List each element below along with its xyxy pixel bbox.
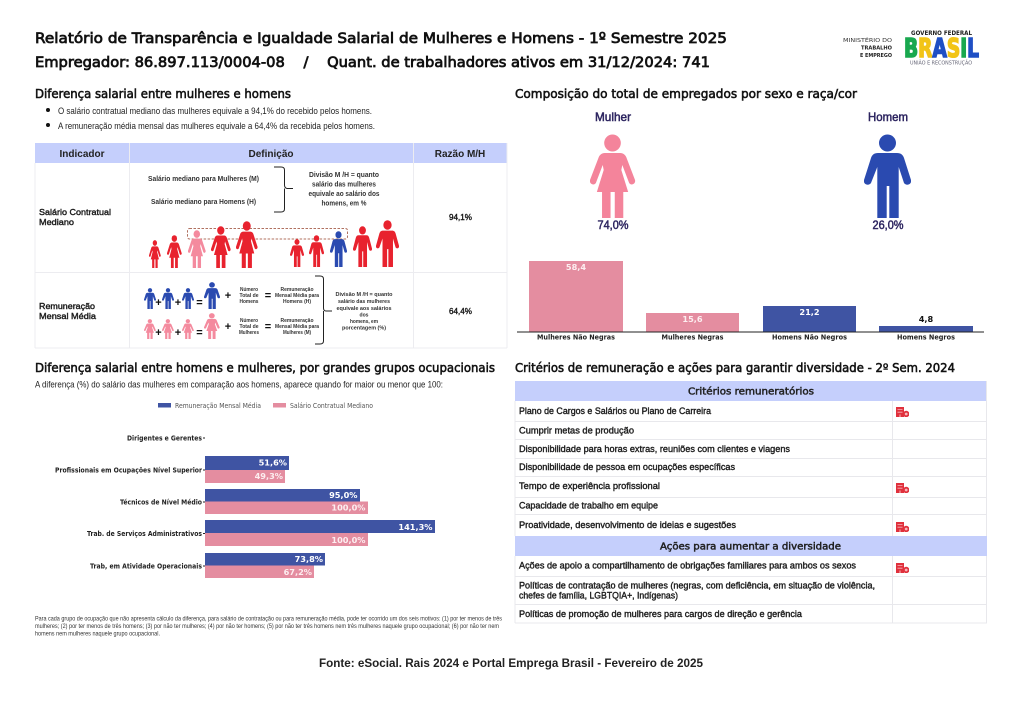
bar chart: sexo e raça/cor: Homens Não Negros bbox=[772, 334, 847, 342]
definition explanation: salário das mulheres bbox=[312, 180, 376, 188]
formula: women: + bbox=[225, 321, 231, 333]
criteria rows bbox=[519, 406, 790, 530]
criteria rows: Disponibilidade para horas extras, reuniões com clientes e viagens bbox=[519, 444, 790, 454]
title: Relatório de Transparência e Igualdade Salarial de Mulheres e Homens - 1º Semestre 2025 bbox=[35, 31, 727, 47]
action rows: chefes de família, LGBTQIA+, Indígenas) bbox=[519, 590, 678, 600]
formula: women: Mulheres (M) bbox=[283, 330, 311, 336]
logo wordmark: Brasil: BRASIL bbox=[904, 34, 979, 64]
title bbox=[35, 31, 727, 71]
pictogram: homem: 26,0% bbox=[872, 218, 904, 232]
footnote bbox=[35, 616, 503, 638]
formula: women: Remuneração bbox=[280, 318, 314, 324]
table header: Indicador bbox=[59, 149, 105, 160]
pictogram: mulher: 74,0% bbox=[598, 218, 629, 232]
formula: women: = bbox=[265, 321, 271, 333]
bullet list: A remuneração média mensal das mulheres equivale a 64,4% da recebida pelos homens. bbox=[58, 121, 375, 132]
bar chart: grupos ocupacionais: Trab. de Serviços Administrativos bbox=[87, 530, 202, 538]
section header: critérios remuneratórios: Critérios remuneratórios bbox=[688, 386, 814, 398]
bar chart: sexo e raça/cor: Mulheres Não Negras bbox=[537, 334, 615, 342]
formula: men: + bbox=[225, 290, 231, 302]
bar chart: grupos ocupacionais: Profissionais em Ocupações Nível Superior bbox=[55, 466, 202, 474]
formula: women: Total de bbox=[240, 324, 259, 330]
definition explanation: Divisão M /H = quanto bbox=[336, 292, 393, 298]
icons: women by salary bbox=[149, 221, 258, 268]
indicator name bbox=[39, 207, 111, 227]
bar chart: sexo e raça/cor: 21,2 bbox=[799, 307, 820, 317]
formula: men: + bbox=[155, 297, 162, 309]
title: Empregador: 86.897.113/0004-08 / Quant. de trabalhadores ativos em 31/12/2024: 741 bbox=[35, 55, 710, 71]
formula: women: Mensal Média para bbox=[275, 324, 320, 330]
ratio value: 64,4% bbox=[449, 306, 472, 316]
bar chart: grupos ocupacionais: 73,8% bbox=[295, 554, 323, 564]
bullet list bbox=[46, 106, 375, 132]
bar chart: grupos ocupacionais: 49,3% bbox=[255, 471, 283, 481]
legend: Remuneração Mensal Média bbox=[175, 402, 261, 410]
definition explanation bbox=[308, 170, 380, 208]
icons: critério adotado bbox=[896, 407, 908, 573]
action rows: Políticas de promoção de mulheres para cargos de direção e gerência bbox=[519, 609, 802, 619]
bar chart: grupos ocupacionais: 67,2% bbox=[284, 567, 312, 577]
table header bbox=[59, 149, 485, 160]
bullet list: O salário contratual mediano das mulheres equivale a 94,1% do recebido pelos homens. bbox=[58, 106, 372, 117]
heading: Diferença salarial entre homens e mulheres, por grandes grupos ocupacionais bbox=[35, 361, 495, 375]
indicator name bbox=[39, 301, 96, 321]
bar chart: grupos ocupacionais: 100,0% bbox=[331, 535, 366, 545]
formula: men: Total de bbox=[240, 293, 259, 299]
criteria rows: Disponibilidade de pessoa em ocupações específicas bbox=[519, 462, 735, 472]
logo text: união e reconstrução: UNIÃO E RECONSTRUÇÃO bbox=[910, 60, 972, 66]
criteria rows: Cumprir metas de produção bbox=[519, 426, 634, 436]
definition explanation: salário das mulheres bbox=[338, 299, 390, 305]
legend: Salário Contratual Mediano bbox=[290, 402, 373, 410]
criteria rows: Plano de Cargos e Salários ou Plano de Carreira bbox=[519, 406, 711, 416]
bar chart: grupos ocupacionais: Técnicos de Nível Médio bbox=[120, 498, 202, 506]
source footer: Fonte: eSocial. Rais 2024 e Portal Emprega Brasil - Fevereiro de 2025 bbox=[319, 656, 703, 670]
pictogram: mulher bbox=[590, 110, 635, 232]
table header: Definição bbox=[248, 149, 294, 160]
icons: men by salary bbox=[290, 220, 399, 267]
bar chart: sexo e raça/cor: 4,8 bbox=[919, 314, 934, 324]
definition explanation: dos bbox=[360, 312, 368, 318]
row: remuneração mensal média bbox=[39, 276, 472, 344]
definition labels bbox=[148, 174, 259, 206]
heading: Critérios de remuneração e ações para garantir diversidade - 2º Sem. 2024 bbox=[515, 361, 955, 375]
logos: ministério e governo federal bbox=[843, 30, 979, 66]
panel: critérios de remuneração e ações bbox=[515, 361, 987, 623]
formula: women: + bbox=[155, 327, 162, 339]
formula: men: Número bbox=[240, 287, 259, 293]
formula: men: Homens bbox=[240, 299, 258, 305]
footnote: mulheres; (2) por ter menos de três homens; (3) por não ter mulheres; (4) por não ter homens; (5) por não ter três homens nem três mulheres naquele grupo ocupacional; (6) por não ter nem bbox=[35, 623, 499, 630]
formula: women: + bbox=[175, 327, 181, 339]
bar chart: sexo e raça/cor: 15,6 bbox=[682, 314, 703, 324]
definition explanation: porcentagem (%) bbox=[342, 326, 386, 332]
indicator name: Salário Contratual bbox=[39, 207, 111, 217]
definition labels: Salário mediano para Mulheres (M) bbox=[148, 174, 259, 183]
heading: Diferença salarial entre mulheres e homens bbox=[35, 87, 291, 101]
formula: women: Mulheres bbox=[239, 330, 259, 336]
pictogram: mulher: Mulher bbox=[595, 110, 631, 124]
definition explanation: equivale ao salário dos bbox=[308, 189, 380, 198]
definition explanation: equivale aos salários bbox=[336, 306, 392, 312]
formula: men: Homens (H) bbox=[283, 299, 311, 305]
bar chart: grupos ocupacionais: Trab, em Atividade Operacionais bbox=[90, 562, 202, 570]
logo text: ministério: MINISTÉRIO DO bbox=[843, 36, 892, 44]
indicator name: Mensal Média bbox=[39, 311, 96, 321]
brace bbox=[274, 167, 293, 212]
bar chart: sexo e raça/cor: 58,4 bbox=[566, 262, 586, 272]
definition explanation: homens, em % bbox=[322, 198, 367, 208]
criteria rows: Proatividade, desenvolvimento de ideias e sugestões bbox=[519, 520, 737, 530]
bar chart: grupos ocupacionais bbox=[55, 434, 435, 578]
formula: women: = bbox=[196, 327, 203, 339]
criteria rows: Capacidade de trabalho em equipe bbox=[519, 500, 658, 510]
formula: women: Número bbox=[240, 318, 259, 324]
bar chart: grupos ocupacionais: Dirigentes e Gerentes bbox=[127, 434, 202, 442]
legend bbox=[158, 402, 373, 410]
ratio value: 94,1% bbox=[449, 212, 472, 222]
formula: men: = bbox=[196, 297, 203, 309]
footnote: Para cada grupo de ocupação que não apresenta cálculo da diferença, para salário de contratação ou para remuneração média, pode ter ocorrido um dos seis motivos: (1) por ter menos de três bbox=[35, 616, 503, 622]
action rows: Políticas de contratação de mulheres (negras, com deficiência, em situação de violência, bbox=[519, 580, 875, 590]
indicator name: Remuneração bbox=[39, 301, 95, 311]
footnote: homens nem mulheres naquele grupo ocupacional. bbox=[35, 630, 160, 638]
pictogram: homem: Homem bbox=[868, 110, 908, 124]
panel: composição do total de empregados bbox=[515, 87, 984, 342]
row: salário contratual mediano bbox=[39, 167, 472, 268]
table header: Razão M/H bbox=[435, 149, 485, 160]
bar chart: grupos ocupacionais: 141,3% bbox=[398, 522, 432, 532]
table: critérios bbox=[515, 381, 987, 623]
panel: diferença por grupos ocupacionais bbox=[35, 361, 503, 638]
brace bbox=[315, 276, 332, 344]
bar chart: grupos ocupacionais: 51,6% bbox=[259, 458, 287, 468]
formula: men: Remuneração bbox=[280, 287, 314, 293]
definition labels: Salário mediano para Homens (H) bbox=[151, 197, 256, 206]
bar chart: sexo e raça/cor: Mulheres Negras bbox=[662, 334, 724, 342]
action rows: Ações de apoio a compartilhamento de obrigações familiares para ambos os sexos bbox=[519, 560, 857, 570]
action rows bbox=[519, 560, 875, 619]
logo text: governo federal: GOVERNO FEDERAL bbox=[911, 30, 972, 37]
logo text: ministério: TRABALHO bbox=[861, 46, 892, 52]
bar chart: sexo e raça/cor bbox=[517, 261, 984, 342]
bar chart: sexo e raça/cor: Homens Negros bbox=[897, 334, 955, 342]
logo text: ministério bbox=[843, 36, 892, 59]
definition explanation: homens, em bbox=[350, 319, 378, 325]
heading: Composição do total de empregados por sexo e raça/cor bbox=[515, 87, 857, 101]
definition explanation: Divisão M /H = quanto bbox=[309, 170, 379, 179]
formula: men bbox=[144, 282, 320, 309]
dashed median highlight bbox=[188, 228, 348, 239]
formula: women bbox=[144, 313, 320, 339]
table: indicadores bbox=[35, 143, 507, 348]
criteria rows: Tempo de experiência profissional bbox=[519, 481, 660, 491]
formula: men: = bbox=[265, 290, 271, 302]
pictogram: homem bbox=[864, 110, 911, 232]
subtitle: A diferença (%) do salário das mulheres em comparação aos homens, aparece quando for maior ou menor que 100: bbox=[35, 380, 443, 390]
panel: diferença salarial entre mulheres e homens bbox=[35, 87, 507, 348]
indicator name: Mediano bbox=[39, 217, 74, 227]
formula: men: + bbox=[175, 297, 181, 309]
bar chart: grupos ocupacionais: 95,0% bbox=[329, 490, 358, 500]
logo text: ministério: E EMPREGO bbox=[860, 53, 892, 59]
section header: ações: Ações para aumentar a diversidade bbox=[660, 542, 841, 552]
definition explanation bbox=[336, 292, 393, 332]
bar chart: grupos ocupacionais: 100,0% bbox=[331, 502, 366, 512]
formula: men: Mensal Média para bbox=[275, 293, 320, 299]
